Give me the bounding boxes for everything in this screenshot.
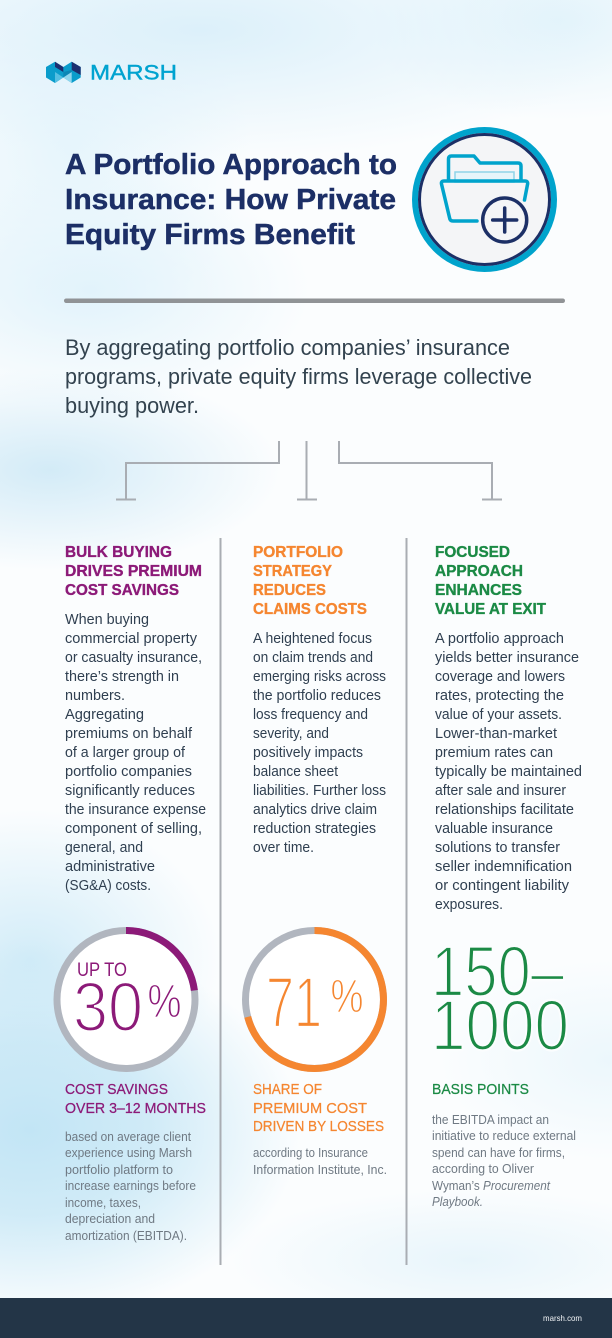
caption: share of premium	[253, 1081, 387, 1177]
body: portfolio strategy: emerging risks across	[253, 669, 386, 685]
stat label: share of premium: DRIVEN BY LOSSES	[253, 1118, 384, 1135]
stat: 150–1000: 150–	[431, 933, 564, 1012]
caption: cost savings	[65, 1081, 206, 1243]
body: bulk buying: significantly reduces	[65, 783, 195, 799]
heading: portfolio strategy: CLAIMS COSTS	[253, 601, 367, 618]
body: portfolio strategy: analytics drive claim	[253, 802, 377, 818]
body: bulk buying: premiums on behalf	[65, 726, 193, 742]
heading: portfolio strategy	[253, 544, 367, 618]
body: focused approach: yields better insurance	[435, 650, 579, 666]
heading: bulk buying: DRIVES PREMIUM	[65, 563, 202, 580]
note: share of premium	[253, 1146, 387, 1177]
body: focused approach: rates, protecting the	[435, 688, 564, 704]
title: Insurance: How Private	[65, 184, 396, 216]
note: basis points	[432, 1113, 576, 1209]
stat: 150–1000	[431, 933, 569, 1066]
body: bulk buying: or casualty insurance,	[65, 650, 202, 666]
caption: basis points	[432, 1081, 576, 1209]
body: focused approach: coverage and lowers	[435, 669, 565, 685]
intro text: buying power.	[65, 393, 199, 418]
body: focused approach: typically be maintained	[435, 764, 582, 780]
note: basis points: the EBITDA impact an	[432, 1113, 549, 1127]
note: cost savings: based on average client	[65, 1130, 191, 1144]
stat label: basis points: BASIS POINTS	[432, 1081, 529, 1098]
note: basis points: Playbook.	[432, 1195, 483, 1209]
note: basis points: according to Oliver	[432, 1162, 534, 1176]
note: cost savings: amortization (EBITDA).	[65, 1229, 187, 1243]
panel: portfolio strategy	[253, 544, 386, 856]
body: bulk buying: numbers.	[65, 688, 125, 704]
body: focused approach: premium rates can	[435, 745, 553, 761]
panel: focused approach	[435, 544, 582, 913]
heading: focused approach: FOCUSED	[435, 544, 510, 561]
body: portfolio strategy: over time.	[253, 840, 314, 856]
wordmark: MARSH	[90, 62, 177, 84]
panel: bulk buying	[65, 544, 206, 894]
body: focused approach: after sale and insurer	[435, 783, 566, 799]
body: focused approach: seller indemnification	[435, 859, 572, 875]
heading: portfolio strategy: REDUCES	[253, 582, 326, 599]
intro text: By aggregating portfolio companies’ insurance	[65, 335, 510, 360]
footer bar: marsh.com	[543, 1313, 582, 1323]
stat: up to 30% ring: 30	[73, 968, 143, 1046]
heading: bulk buying: COST SAVINGS	[65, 582, 179, 599]
stat: up to 30% ring: %	[148, 974, 182, 1027]
body: portfolio strategy: reduction strategies	[253, 821, 376, 837]
body: focused approach: relationships facilitate	[435, 802, 574, 818]
body: focused approach: A portfolio approach	[435, 631, 564, 647]
body: focused approach	[435, 631, 582, 913]
body: portfolio strategy: A heightened focus	[253, 631, 372, 647]
body: focused approach: valuable insurance	[435, 821, 553, 837]
note: cost savings: depreciation and	[65, 1212, 155, 1226]
body: portfolio strategy: on claim trends and	[253, 650, 373, 666]
body: focused approach: value of your assets.	[435, 707, 562, 723]
body: bulk buying: of a larger group of	[65, 745, 186, 761]
body: portfolio strategy: positively impacts	[253, 745, 363, 761]
title	[65, 149, 397, 251]
logo: Marsh	[46, 62, 177, 84]
body: bulk buying: portfolio companies	[65, 764, 192, 780]
note: cost savings: experience using Marsh	[65, 1146, 192, 1160]
heading: focused approach: VALUE AT EXIT	[435, 601, 547, 618]
body: portfolio strategy: severity, and	[253, 726, 329, 742]
body: bulk buying: commercial property	[65, 631, 198, 647]
footer bar	[0, 1298, 612, 1338]
intro text: programs, private equity firms leverage collective	[65, 364, 532, 389]
stat label: share of premium: PREMIUM COST	[253, 1100, 367, 1117]
note: cost savings	[65, 1130, 196, 1243]
stat: up to 30% ring: UP TO	[77, 959, 127, 981]
body: bulk buying	[65, 612, 206, 894]
stat label: cost savings: OVER 3–12 MONTHS	[65, 1100, 206, 1117]
body: portfolio strategy: the portfolio reduces	[253, 688, 381, 704]
heading: bulk buying	[65, 544, 202, 599]
stat: 150–1000: 1000	[431, 987, 569, 1066]
body: focused approach: exposures.	[435, 897, 503, 913]
heading: portfolio strategy: STRATEGY	[253, 563, 333, 580]
heading: portfolio strategy: PORTFOLIO	[253, 544, 343, 561]
note: cost savings: income, taxes,	[65, 1196, 141, 1210]
body: portfolio strategy	[253, 631, 386, 856]
note: cost savings: increase earnings before	[65, 1179, 196, 1193]
note: basis points: Wyman’s Procurement	[432, 1179, 550, 1193]
body: bulk buying: the insurance expense	[65, 802, 206, 818]
note: share of premium: Information Institute, Inc.	[253, 1163, 387, 1177]
stat label: share of premium: SHARE OF	[253, 1081, 322, 1098]
body: portfolio strategy: balance sheet	[253, 764, 338, 780]
body: bulk buying: general, and	[65, 840, 143, 856]
body: bulk buying: Aggregating	[65, 707, 144, 723]
stat label: cost savings	[65, 1081, 206, 1117]
stat label: share of premium	[253, 1081, 384, 1135]
stat: 71% ring: %	[330, 969, 364, 1022]
body: bulk buying: component of selling,	[65, 821, 202, 837]
icon: Marsh mark	[46, 62, 81, 83]
connector brackets	[116, 441, 502, 500]
column dividers	[220, 538, 408, 1265]
heading: focused approach: APPROACH	[435, 563, 523, 580]
stat: 71% ring: 71	[266, 964, 322, 1043]
body: bulk buying: there’s strength in	[65, 669, 179, 685]
body: portfolio strategy: loss frequency and	[253, 707, 368, 723]
intro text	[65, 335, 532, 418]
heading: focused approach	[435, 544, 547, 618]
body: focused approach: Lower-than-market	[435, 726, 557, 742]
body: focused approach: or contingent liability	[435, 878, 570, 894]
body: bulk buying: When buying	[65, 612, 149, 628]
body: portfolio strategy: liabilities. Further loss	[253, 783, 386, 799]
title: Equity Firms Benefit	[65, 219, 355, 251]
heading: bulk buying: BULK BUYING	[65, 544, 172, 561]
stat: up to 30% ring	[57, 930, 195, 1068]
body: focused approach: solutions to transfer	[435, 840, 560, 856]
body: bulk buying: (SG&A) costs.	[65, 878, 151, 894]
note: share of premium: according to Insurance	[253, 1146, 368, 1160]
note: cost savings: portfolio platform to	[65, 1163, 173, 1177]
note: basis points: spend can have for firms,	[432, 1146, 565, 1160]
divider rule	[64, 298, 565, 303]
body: bulk buying: administrative	[65, 859, 155, 875]
heading: focused approach: ENHANCES	[435, 582, 522, 599]
note: basis points: initiative to reduce external	[432, 1129, 576, 1143]
icon: folder with plus in circle	[415, 130, 554, 269]
stat: 71% ring	[246, 930, 384, 1069]
title: A Portfolio Approach to	[65, 149, 397, 181]
stat label: cost savings: COST SAVINGS	[65, 1081, 168, 1098]
